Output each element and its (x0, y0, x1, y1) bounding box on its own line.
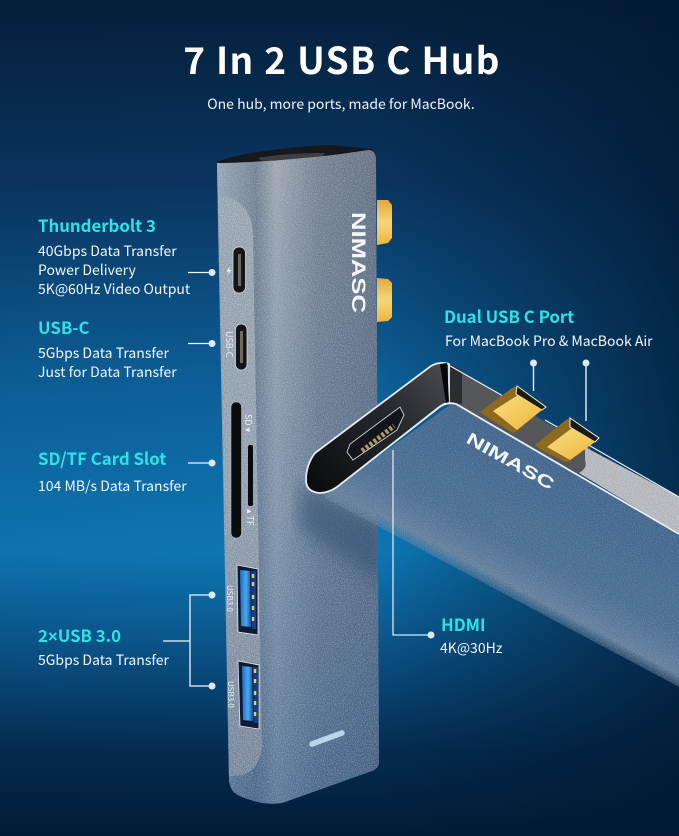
LED indicator (312, 733, 342, 744)
USB-C plug 1 (480, 386, 546, 433)
callout: HDMI: 4K@30Hz (440, 638, 503, 658)
dark end cap (306, 363, 449, 493)
HDMI port (347, 407, 404, 460)
callout: Dual USB C Port: For MacBook Pro & MacBook Air (445, 331, 653, 351)
USB 3.0 port 1 (237, 565, 258, 635)
callout: SD/TF Card Slot (38, 446, 216, 496)
TF card slot (248, 445, 253, 506)
callout: USB-C: USB-C (38, 315, 89, 339)
callout: USB-C: 5Gbps Data Transfer (38, 343, 170, 363)
hub body (217, 150, 379, 804)
callout: HDMI: HDMI (441, 612, 486, 636)
callout: Thunderbolt 3: 40Gbps Data Transfer (38, 241, 177, 261)
callout: Dual USB C Port (444, 304, 653, 421)
second hub, angled view (306, 363, 679, 687)
callout: Thunderbolt 3: 5K@60Hz Video Output (38, 279, 191, 299)
callout: Thunderbolt 3: Thunderbolt 3 (38, 213, 156, 237)
callout: USB-C: Just for Data Transfer (38, 362, 177, 382)
port labels: USB3.0 (224, 585, 235, 612)
NIMASC logo: NIMASC (347, 212, 368, 313)
callout: Thunderbolt 3 (38, 213, 216, 299)
callout: Dual USB C Port: Dual USB C Port (444, 304, 574, 328)
USB 3.0 port 2 (238, 661, 259, 729)
callout: USB-C (38, 315, 216, 382)
subtitle: One hub, more ports, made for MacBook. (207, 94, 475, 114)
blue face (323, 403, 679, 687)
side recess band (219, 197, 262, 776)
USB-C port 2 (236, 324, 247, 370)
callout: HDMI (393, 450, 503, 658)
gold connectors on main hub (377, 200, 392, 322)
main hub, front view (217, 145, 392, 804)
shadow of second hub (300, 485, 385, 585)
callout: Thunderbolt 3: Power Delivery (38, 260, 136, 280)
port labels: USB-C (223, 331, 236, 358)
title: 7 In 2 USB C Hub (183, 31, 501, 85)
USB-C plug 2 (535, 418, 599, 462)
callout: 2×USB 3.0 (38, 592, 216, 690)
callout: SD/TF Card Slot: 104 MB/s Data Transfer (38, 476, 187, 496)
silver side (579, 447, 679, 534)
dark side band (445, 363, 590, 480)
port labels (223, 266, 257, 708)
SD card slot (231, 402, 242, 538)
NIMASC logo, angled: NIMASC (463, 429, 558, 494)
callout: 2×USB 3.0: 2×USB 3.0 (38, 623, 121, 647)
port labels: USB3.0 (225, 681, 236, 708)
USB-C port 1 (233, 247, 246, 293)
hub top opening (217, 145, 376, 172)
port labels: ▴ TF (244, 509, 257, 526)
callout: SD/TF Card Slot: SD/TF Card Slot (38, 446, 166, 470)
callout: 2×USB 3.0: 5Gbps Data Transfer (38, 650, 170, 670)
port labels: SD ▾ (242, 414, 255, 433)
